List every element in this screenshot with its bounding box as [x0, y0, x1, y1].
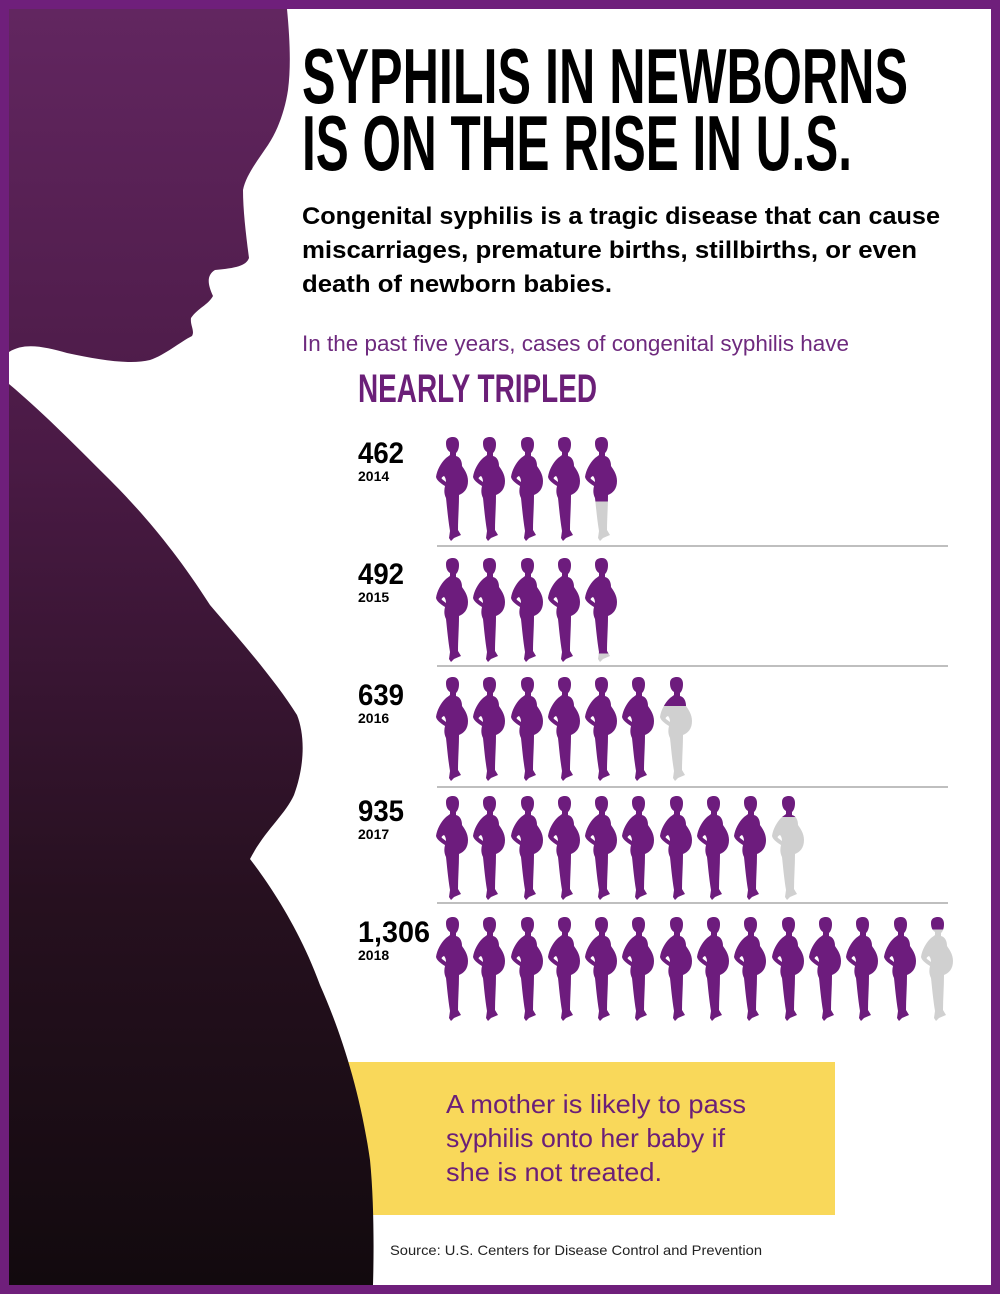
row 2017: 935: [358, 795, 404, 828]
intro text: miscarriages, premature births, stillbirths, or even: [302, 237, 917, 264]
callout: yellow box: she is not treated.: [446, 1157, 662, 1187]
row 2016: 639: [358, 679, 404, 712]
source: Source: U.S. Centers for Disease Control and Prevention: [390, 1242, 762, 1258]
title: [302, 32, 908, 187]
row 2017: [358, 795, 804, 900]
callout: yellow box: A mother is likely to pass: [446, 1089, 746, 1119]
row 2016: [358, 677, 692, 781]
lead-in text: In the past five years, cases of congenital syphilis have: [302, 331, 849, 356]
row 2014: 2014: [358, 468, 389, 484]
row 2018: [358, 916, 953, 1021]
row 2017: 2017: [358, 826, 389, 842]
intro text: death of newborn babies.: [302, 271, 612, 298]
row 2016: 2016: [358, 710, 389, 726]
row 2018: 2018: [358, 947, 389, 963]
separators: [437, 546, 948, 903]
heading: nearly tripled: NEARLY TRIPLED: [358, 367, 597, 411]
intro text: [302, 203, 940, 298]
row 2014: [358, 437, 617, 541]
callout: yellow box: syphilis onto her baby if: [446, 1123, 726, 1153]
silhouette: pregnant woman: [9, 9, 374, 1285]
row 2015: 492: [358, 558, 404, 591]
row 2014: 462: [358, 437, 404, 470]
row 2015: [358, 558, 617, 662]
intro text: Congenital syphilis is a tragic disease that can cause: [302, 203, 940, 230]
row 2015: 2015: [358, 589, 389, 605]
callout: yellow box: [345, 1062, 835, 1215]
row 2018: 1,306: [358, 916, 430, 949]
